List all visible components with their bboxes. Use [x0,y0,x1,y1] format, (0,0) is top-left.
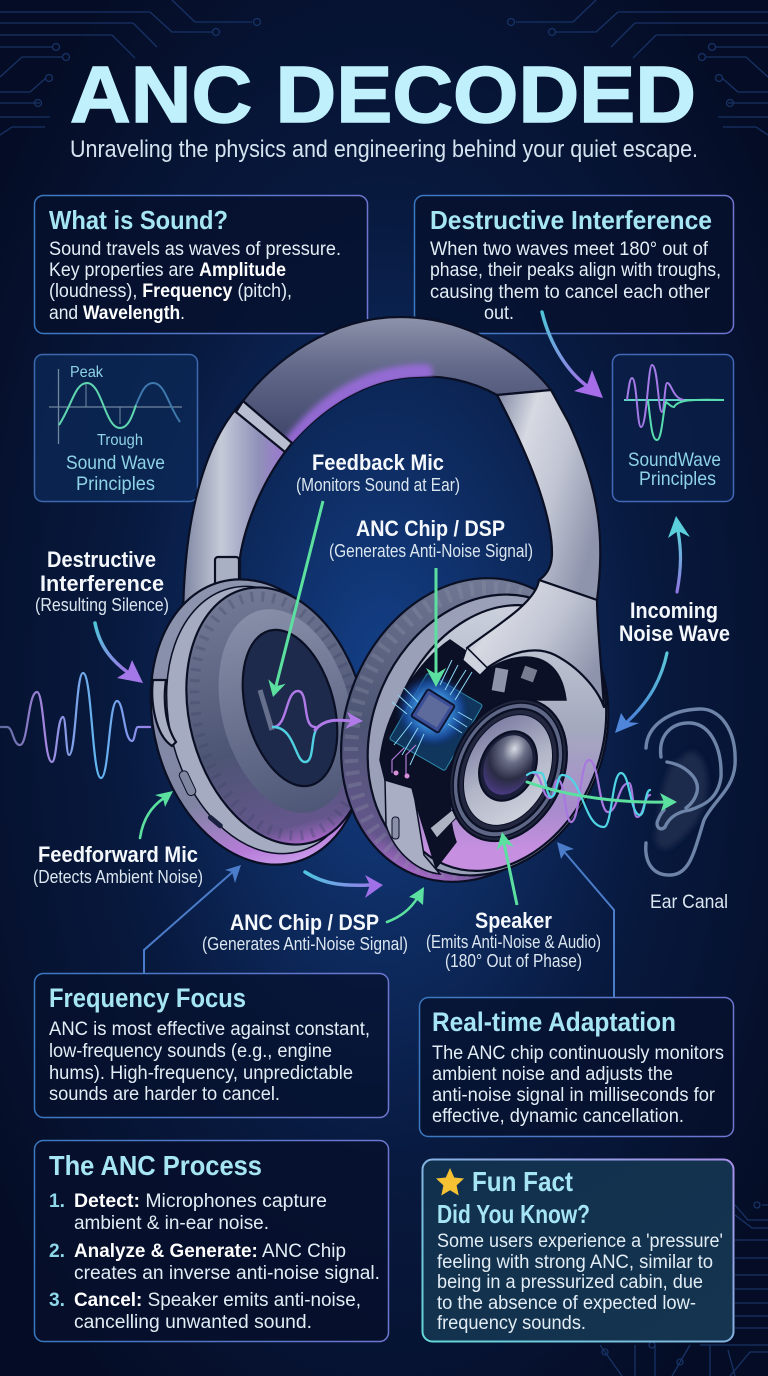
circuit board [389,660,483,771]
label: incoming noise wave: Incoming [630,598,718,623]
icon: ear [646,709,735,875]
text block: fun fact: frequency sounds. [437,1313,586,1334]
heading: fun fact: Fun Fact [472,1166,573,1197]
text block: adaptation description: anti-noise signal in milliseconds for [432,1085,716,1106]
panel: real-time adaptation [420,998,734,1136]
step 2 [49,1241,380,1284]
label: feedback mic [296,450,460,495]
text block: interference description [430,239,721,324]
chart: cancelling waves [624,365,724,440]
step 2: 2. [49,1241,65,1262]
small parts [491,667,509,693]
heading: what is sound: What is Sound? [49,205,228,235]
label: destructive interference: Destructive [47,547,156,572]
panel: sound wave principles: Trough [97,432,143,449]
panel: sound wave principles [34,354,198,502]
wave inside left cup [273,691,318,762]
text block: sound description [49,239,341,324]
title: ANC DECODED [70,50,696,139]
arrow: bottom cup [305,872,383,898]
arrow: feedback mic [268,501,323,697]
subheading: did you know: Did You Know? [437,1199,590,1229]
panel: frequency focus [34,974,388,1118]
label: anc chip lower: ANC Chip / DSP [230,910,379,935]
heading: real-time adaptation: Real-time Adaptation [432,1007,676,1037]
label: incoming noise wave: Noise Wave [619,621,730,646]
connector: frequency focus [144,865,241,973]
text block: interference description: When two waves meet 180° out of [430,239,709,260]
label: anc chip upper [329,516,533,561]
label: feedforward mic [33,842,203,887]
headphones illustration [150,316,610,883]
arrow: destructive panel to wave [542,312,603,398]
text block: fun fact: Some users experience a 'pressure' [437,1231,723,1252]
label: anc chip lower [202,910,408,954]
text block: adaptation description: ambient noise and adjusts the [432,1064,673,1085]
text block: interference description: phase, their peaks align with troughs, [430,260,721,281]
text block: fun fact: feeling with strong ANC, similar to [437,1252,713,1273]
label: speaker: Speaker [475,908,552,933]
left ear cup [120,555,396,889]
text block: adaptation description [432,1043,724,1127]
text block: frequency description: hums). High-frequency, unpredictable [49,1063,353,1084]
text block: frequency description [49,1019,370,1105]
step 3: Cancel: Speaker emits anti-noise, [74,1290,361,1311]
text block: frequency description: ANC is most effective against constant, [49,1019,370,1040]
internal compartment [380,640,566,868]
panel: fun fact [422,1160,734,1342]
icon: star [436,1168,464,1196]
chart: peak and trough wave [49,369,182,444]
label: anc chip upper: ANC Chip / DSP [356,516,505,541]
panel: soundwave principles cancellation [612,354,734,502]
lower silver shell piece [385,780,440,874]
text block: sound description: and Wavelength. [49,303,185,324]
label: speaker: (Emits Anti-Noise & Audio) [426,932,601,952]
arrow: up to soundwave panel [668,516,690,592]
text block: fun fact: being in a pressurized cabin, due [437,1272,703,1293]
arrow: into ear [527,782,677,811]
speaker [427,680,589,860]
panel: destructive interference [414,196,734,334]
heading: destructive interference: Destructive Interference [430,205,712,235]
side button [152,680,176,746]
label: speaker [426,908,601,971]
arrow: left cup wave to right cup [315,712,363,730]
label: feedforward mic: (Detects Ambient Noise) [33,867,203,887]
panel: what is sound [34,196,368,334]
step 1: 1. [49,1191,65,1212]
panel: sound wave principles: Principles [76,473,155,495]
panel: sound wave principles: Peak [70,364,104,381]
silver arm [467,580,604,707]
label: speaker: (180° Out of Phase) [445,951,582,971]
arrow: speaker [497,832,517,905]
label: anc chip lower: (Generates Anti-Noise Signal) [202,934,408,954]
text block: adaptation description: The ANC chip continuously monitors [432,1043,724,1064]
text block: sound description: (loudness), Frequency (pitch), [49,281,292,302]
wave: left noise wave [0,673,150,778]
step 2: Analyze & Generate: ANC Chip [74,1241,346,1262]
wave: speaker output waves [527,760,650,827]
step 3: cancelling unwanted sound. [74,1312,312,1333]
step 1: ambient & in-ear noise. [74,1213,269,1234]
mic grille [178,770,197,797]
text block: interference description: out. [484,303,514,324]
label: ear canal: Ear Canal [650,891,728,913]
arrow: chip [426,568,446,687]
panel: soundwave principles cancellation: SoundWave [628,449,721,471]
heading: the anc process: The ANC Process [49,1150,262,1181]
step 2: creates an inverse anti-noise signal. [74,1263,380,1284]
step 1: Detect: Microphones capture [74,1191,327,1212]
panel: soundwave principles cancellation: Principles [639,468,716,490]
chip [411,689,455,733]
label: incoming noise wave [619,598,730,646]
text block: frequency description: low-frequency sounds (e.g., engine [49,1041,332,1062]
heading: frequency focus: Frequency Focus [49,983,246,1013]
label: destructive interference: Interference [40,571,164,596]
label: feedforward mic: Feedforward Mic [38,842,198,867]
subtitle: Unraveling the physics and engineering behind your quiet escape. [70,136,698,163]
label: feedback mic: (Monitors Sound at Ear) [296,475,460,495]
label: feedback mic: Feedback Mic [312,450,444,475]
label: destructive interference: (Resulting Silence) [35,595,169,615]
headband [183,317,600,625]
text block: frequency description: sounds are harder to cancel. [49,1084,280,1105]
text block: interference description: causing them to cancel each other [430,282,711,303]
panel: the anc process [34,1140,388,1342]
text block: fun fact [437,1231,723,1334]
text block: sound description: Key properties are Amplitude [49,260,286,281]
right ear cup [300,542,649,918]
connector: real-time adaptation [557,842,614,997]
text block: sound description: Sound travels as waves of pressure. [49,239,341,260]
step 1 [49,1191,327,1234]
panel: sound wave principles: Sound Wave [66,452,165,474]
step 3: 3. [49,1290,65,1311]
arrow: feedforward mic [140,791,173,838]
step 3 [49,1290,361,1333]
label: anc chip upper: (Generates Anti-Noise Signal) [329,541,533,561]
label: destructive interference [35,547,169,615]
text block: fun fact: to the absence of expected low- [437,1293,696,1314]
arrow: chip to cup [387,887,424,922]
arrow: resulting silence [95,623,143,683]
arrow: incoming noise [615,653,667,733]
text block: adaptation description: effective, dynamic cancellation. [432,1106,684,1127]
